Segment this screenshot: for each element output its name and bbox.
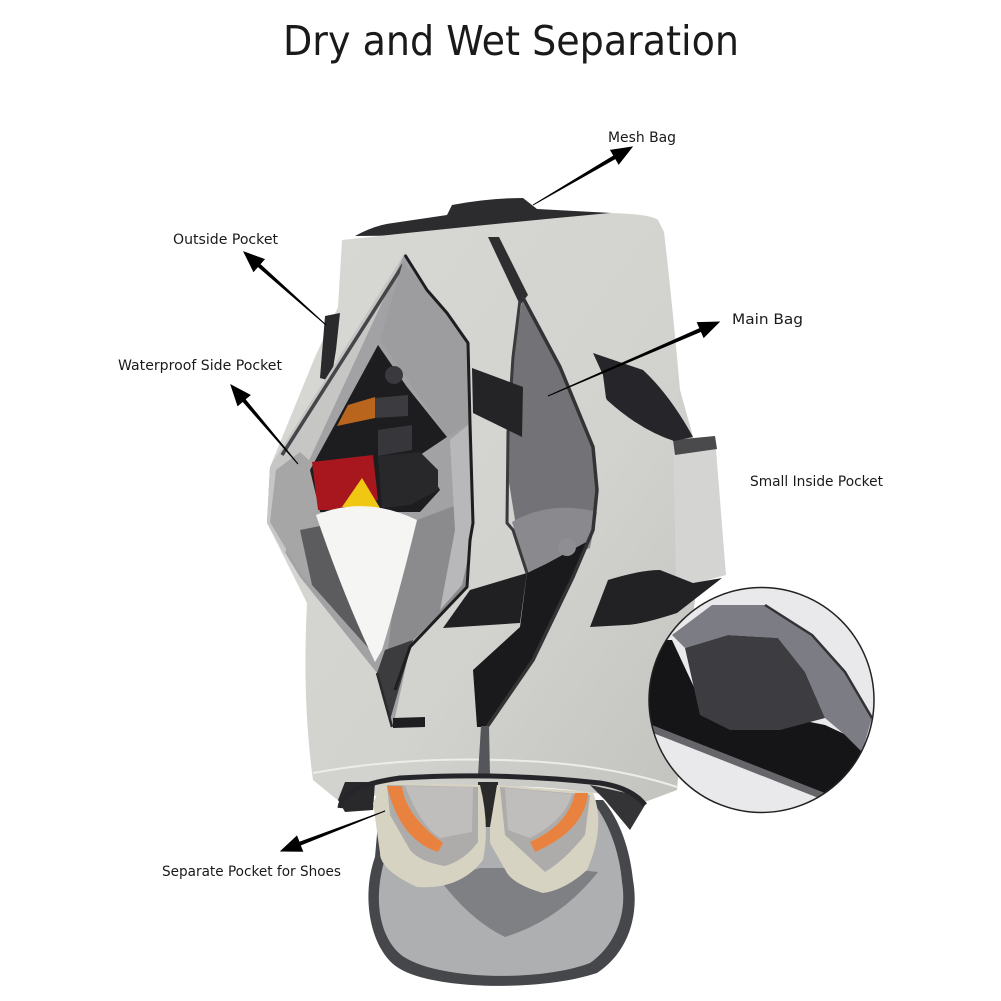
pocket edge zipper [395,255,473,690]
waterproof side pocket [267,253,473,727]
arrow: main bag [548,322,719,396]
arrow: waterproof side pocket [231,385,298,464]
label: separate pocket for shoes: Separate Pocket for Shoes [162,864,341,880]
bag illustration [267,198,726,986]
label: outside pocket: Outside Pocket [173,232,279,248]
body seam [313,760,677,787]
main zipper pull [478,726,490,775]
orange bottle [337,397,375,426]
label: mesh bag: Mesh Bag [608,130,676,146]
main bag opening [473,237,597,727]
lower right handle [590,570,722,627]
label: waterproof side pocket: Waterproof Side Pocket [118,358,283,374]
inset circle: small inside pocket [645,585,880,815]
arrow: separate pocket for shoes [281,811,385,851]
small side pocket [673,436,726,585]
red label [312,455,378,510]
lux bottle [378,452,438,508]
pocket zipper pull [393,717,425,728]
right transparent lining [385,500,470,675]
shoe compartment zipper [340,776,645,808]
centre upper strap [472,368,523,437]
mesh lining [380,262,470,437]
label: main bag: Main Bag [732,312,803,328]
bag body [267,213,695,802]
right shoe [490,785,598,893]
mesh bag top strap [355,198,612,236]
title: Dry and Wet Separation [283,17,739,65]
yellow bottle tip [342,478,380,508]
side mesh pockets [338,782,375,812]
left shoe [373,782,486,887]
arrow: mesh bag [533,147,632,205]
shoes dark gap [478,782,498,827]
outside pocket strap [320,313,340,381]
shoe compartment flap [368,800,635,986]
bottle caps [385,366,403,384]
label: small inside pocket: Small Inside Pocket [750,474,883,490]
towel [316,506,417,662]
arrow: outside pocket [244,252,326,325]
upper right handle [593,353,693,441]
dark contents [310,345,447,512]
centre lower strap [443,573,527,628]
